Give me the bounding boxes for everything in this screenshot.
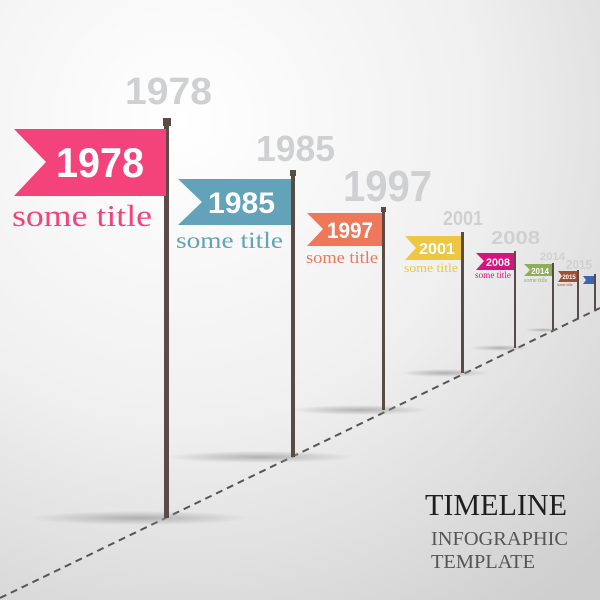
flag 2015: 2015 [566,257,592,272]
flag 2014: 2014 [540,251,566,263]
flag 1997: 1997 [343,162,432,211]
title block: TEMPLATE [431,551,535,573]
flag 2001: 2001 [419,241,455,258]
flag 1985 [176,128,335,457]
flag 1978: some title [12,198,152,233]
flag 1997 [306,162,432,410]
flag 2001: some title [404,260,458,275]
flag 2008: 2008 [486,257,510,269]
flag 2015 [557,257,592,318]
title block: INFOGRAPHIC [431,528,568,550]
flag 1978: 1978 [56,139,144,186]
flag 2014: 2014 [531,267,549,276]
title block: TIMELINE [425,487,567,522]
flag 2015: some title [557,282,573,287]
flag 1997: 1997 [327,218,373,243]
flag 2014 [524,251,566,330]
flag 2015: 2015 [562,275,576,281]
flag 2008 [475,228,540,348]
flag 2001 [404,208,483,373]
flag 1978: 1978 [125,71,212,113]
shadows [30,328,561,525]
flag 1985: 1985 [208,187,275,220]
flag 1985: 1985 [256,128,335,169]
title block [425,487,568,573]
flag 1985: some title [176,228,283,253]
flag 2001: 2001 [443,208,483,230]
flag last [583,274,596,310]
flag 2008: some title [475,270,511,280]
flag 1978 [12,71,212,518]
flag 1997: some title [306,248,378,267]
flag 2008: 2008 [491,228,540,248]
dashed ground line [0,308,600,598]
flag 2014: some title [524,278,548,284]
